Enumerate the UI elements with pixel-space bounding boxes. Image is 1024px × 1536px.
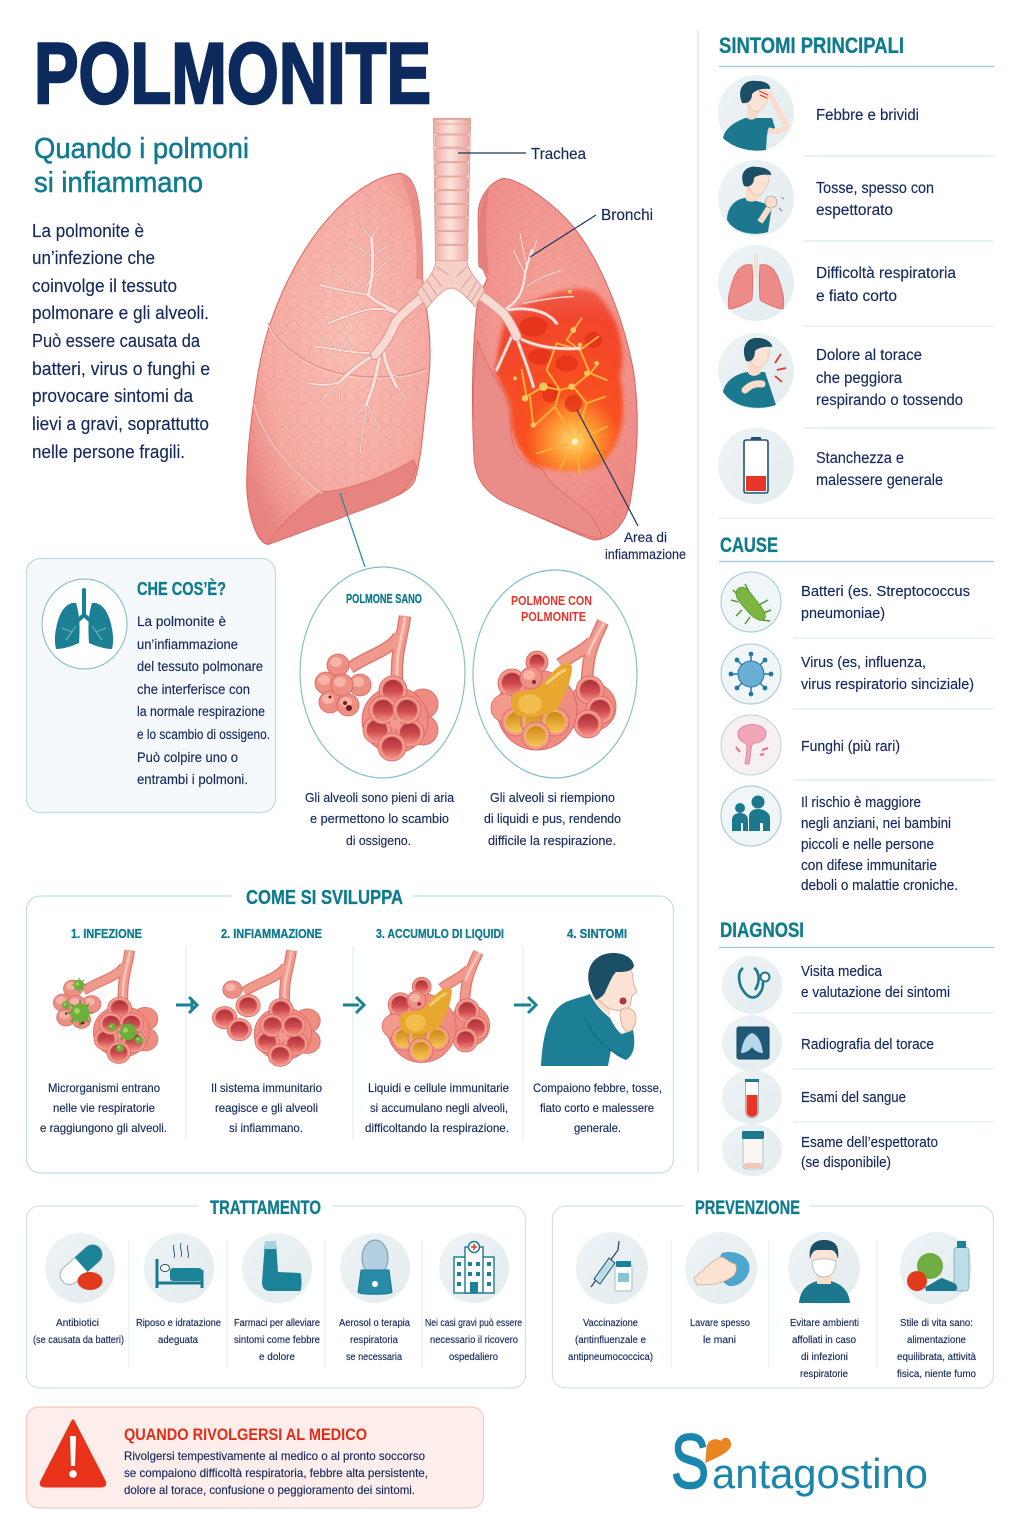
body text: entrambi i polmoni.: [137, 772, 248, 787]
leader line: trachea: [458, 152, 526, 154]
intro paragraph: nelle persone fragili.: [32, 442, 185, 462]
icon: fungi: [721, 715, 781, 775]
text: virus respiratorio sinciziale): [801, 677, 974, 693]
step 2: infiammazione: si infiammano.: [229, 1121, 303, 1135]
illustration: healthy alveoli: [315, 616, 438, 761]
text: Difficoltà respiratoria: [816, 265, 956, 282]
step 3: accumulo di liquidi: [365, 927, 509, 1135]
item: riposo: [136, 1233, 221, 1346]
item: aerosol: Aerosol o terapia: [339, 1318, 410, 1329]
icon: x-ray: [722, 1015, 782, 1071]
item: stile di vita: equilibrata, attività: [897, 1352, 976, 1363]
intro paragraph: lievi a gravi, soprattutto: [32, 414, 209, 434]
text: [801, 1135, 938, 1171]
icon: virus: [721, 644, 781, 704]
leader line: to alveoli: [340, 493, 365, 567]
label: inflammation area: Area di: [624, 530, 667, 545]
text: espettorato: [816, 202, 893, 219]
item: aerosol: se necessaria: [346, 1352, 402, 1363]
heading: POLMONE CON: [511, 594, 592, 608]
panel: che cos'è: [26, 558, 276, 812]
item: lavare le mani: [685, 1232, 757, 1346]
text: Febbre e brividi: [816, 107, 919, 124]
step 1: infezione: Microrganismi entrano: [48, 1081, 160, 1095]
title: POLMONITE: [34, 26, 431, 122]
intro paragraph: [32, 221, 210, 462]
item: aerosol: respiratoria: [350, 1335, 398, 1346]
icon: bacteria: [721, 572, 781, 632]
text: [816, 347, 963, 409]
text: Visita medica: [801, 964, 883, 980]
text: [816, 450, 943, 489]
panel: sintomi principali: [718, 33, 994, 518]
item: vaccinazione: antipneumococcica): [568, 1352, 653, 1363]
item: stile di vita: Stile di vita sano:: [900, 1318, 973, 1329]
item: stile di vita: [897, 1232, 976, 1380]
step 2: infiammazione: 2. INFIAMMAZIONE: [221, 927, 322, 941]
caption: di ossigeno.: [346, 833, 411, 848]
text: Radiografia del torace: [801, 1037, 934, 1053]
panel: come si sviluppa: [26, 887, 674, 1173]
text: Esame dell’espettorato: [801, 1135, 938, 1151]
body text: Rivolgersi tempestivamente al medico o al pronto soccorso: [124, 1449, 425, 1463]
heading: CAUSE: [720, 534, 778, 557]
trachea: [417, 118, 485, 308]
item: ospedale: Nei casi gravi può essere: [425, 1318, 522, 1329]
text: [801, 584, 970, 622]
icon: blood tube: [722, 1070, 782, 1124]
item: farmaci: Farmaci per alleviare: [234, 1318, 320, 1329]
item: farmaci: [234, 1233, 320, 1363]
step 3: accumulo di liquidi: difficoltando la respirazione.: [365, 1121, 509, 1135]
heading: QUANDO RIVOLGERSI AL MEDICO: [124, 1425, 367, 1444]
icon: heart: [705, 1438, 731, 1463]
body text: un’infiammazione: [137, 637, 238, 652]
subtitle: Quando i polmoni: [34, 133, 249, 165]
inflammation area: [495, 289, 623, 473]
item: vaccinazione: Vaccinazione: [583, 1318, 638, 1329]
icon: lungs: [42, 579, 127, 669]
text: pneumoniae): [801, 606, 885, 622]
column divider: [697, 30, 699, 1172]
body text: [137, 614, 270, 787]
item: lavare le mani: le mani: [703, 1335, 736, 1346]
panel: healthy lung: [300, 567, 465, 848]
label: trachea: Trachea: [531, 146, 586, 163]
text: Stanchezza e: [816, 450, 904, 467]
text: [801, 655, 974, 693]
item: ospedale: [425, 1233, 522, 1363]
arrow: [176, 997, 197, 1013]
intro paragraph: Può essere causata da: [32, 331, 201, 351]
item: antibiotici: (se causata da batteri): [33, 1335, 124, 1346]
text: Virus (es, influenza,: [801, 655, 926, 671]
heading: SINTOMI PRINCIPALI: [719, 33, 904, 58]
heading: PREVENZIONE: [695, 1198, 800, 1219]
step 4: sintomi: 4. SINTOMI: [567, 927, 627, 941]
right lung (inflamed): [472, 178, 637, 540]
item: mascherina: [788, 1232, 860, 1380]
intro paragraph: provocare sintomi da: [32, 386, 194, 406]
text: Esami del sangue: [801, 1090, 906, 1106]
body text: la normale respirazione: [137, 704, 265, 719]
leader line: inflammation: [577, 410, 638, 526]
step 1: infezione: e raggiungono gli alveoli.: [40, 1121, 167, 1135]
caption: [484, 790, 621, 848]
heading: DIAGNOSI: [720, 919, 804, 942]
panel: cause: [719, 534, 994, 894]
text: Dolore al torace: [816, 347, 922, 364]
body text: e lo scambio di ossigeno.: [137, 727, 270, 742]
body text: La polmonite è: [137, 614, 226, 629]
text: respirando o tossendo: [816, 392, 963, 409]
body text: che interferisce con: [137, 682, 250, 697]
item: farmaci: e dolore: [259, 1352, 295, 1363]
step 2: infiammazione: reagisce e gli alveoli: [215, 1101, 318, 1115]
item: aerosol: [339, 1233, 410, 1363]
item: mascherina: respiratorie: [800, 1369, 848, 1380]
text: piccoli e nelle persone: [801, 837, 934, 853]
text: che peggiora: [816, 370, 902, 387]
illustration: inflamed alveoli: [491, 622, 616, 750]
panel: pneumonia lung: [473, 570, 637, 848]
panel: prevenzione: [552, 1198, 994, 1388]
item: lavare le mani: Lavare spesso: [690, 1318, 750, 1329]
intro paragraph: polmonare e gli alveoli.: [32, 303, 209, 323]
item: vaccinazione: (antinfluenzale e: [575, 1335, 646, 1346]
panel: trattamento: [26, 1198, 526, 1388]
caption: difficile la respirazione.: [488, 833, 616, 848]
text: deboli o malattie croniche.: [801, 878, 958, 894]
item: antibiotici: Antibiotici: [56, 1318, 99, 1329]
body text: del tessuto polmonare: [137, 659, 263, 674]
body text: se compaiono difficoltà respiratoria, febbre alta persistente,: [124, 1466, 428, 1480]
logo: santagostino: S: [671, 1419, 709, 1505]
subtitle: si infiammano: [34, 167, 203, 199]
step 4: sintomi: generale.: [574, 1121, 621, 1135]
icon: sputum cup: [722, 1124, 782, 1176]
caption: Gli alveoli si riempiono: [490, 790, 615, 805]
step 4: sintomi: [533, 927, 662, 1135]
step 1: infezione: 1. INFEZIONE: [71, 927, 142, 941]
heading: CHE COS’È?: [137, 578, 226, 599]
icon: chest pain: [718, 333, 794, 409]
heading: [511, 594, 592, 624]
item: ospedale: necessario il ricovero: [430, 1335, 518, 1346]
illustration: coughing man: [541, 953, 637, 1066]
text: con difese immunitarie: [801, 858, 937, 874]
item: stile di vita: alimentazione: [907, 1335, 966, 1346]
body text: [124, 1449, 428, 1497]
intro paragraph: La polmonite è: [32, 221, 144, 241]
item: mascherina: di infezioni: [801, 1352, 848, 1363]
item: farmaci: sintomi come febbre: [234, 1335, 320, 1346]
body text: dolore al torace, confusione o peggioramento dei sintomi.: [124, 1483, 415, 1497]
step 4: sintomi: fiato corto e malessere: [540, 1101, 654, 1115]
item: ospedale: ospedaliero: [449, 1352, 498, 1363]
heading: POLMONITE: [521, 610, 586, 624]
heading: COME SI SVILUPPA: [246, 887, 403, 909]
item: mascherina: affollati in caso: [792, 1335, 856, 1346]
text: e valutazione dei sintomi: [801, 985, 950, 1001]
item: vaccinazione: [568, 1232, 653, 1363]
callout: quando rivolgersi al medico: [26, 1407, 484, 1508]
item: riposo: Riposo e idratazione: [136, 1318, 221, 1329]
caption: e permettono lo scambio: [310, 811, 449, 826]
text: [816, 265, 956, 305]
logo: santagostino: antagostino: [712, 1450, 928, 1497]
item: stile di vita: fisica, niente fumo: [897, 1369, 976, 1380]
panel: diagnosi: [719, 919, 994, 1176]
icon: lungs: [718, 245, 794, 321]
text: Batteri (es. Streptococcus: [801, 584, 970, 600]
step 1: infezione: nelle vie respiratorie: [53, 1101, 155, 1115]
heading: TRATTAMENTO: [210, 1198, 321, 1219]
intro paragraph: coinvolge il tessuto: [32, 276, 177, 296]
text: [816, 180, 934, 219]
text: Funghi (più rari): [801, 739, 900, 755]
step 3: accumulo di liquidi: si accumulano negli alveoli,: [370, 1101, 508, 1115]
step 1: infezione: [40, 927, 167, 1135]
arrow: [514, 997, 536, 1013]
item: mascherina: Evitare ambienti: [790, 1318, 859, 1329]
item: antibiotici: [33, 1233, 124, 1346]
icon: cough: [718, 160, 794, 236]
text: [801, 964, 950, 1001]
item: riposo: adeguata: [158, 1335, 198, 1346]
label: inflammation area: infiammazione: [605, 547, 686, 562]
label: inflammation area: [605, 530, 686, 562]
step 3: accumulo di liquidi: 3. ACCUMULO DI LIQUIDI: [376, 927, 504, 941]
left lung (healthy): [247, 173, 430, 544]
subtitle: [34, 133, 249, 199]
body text: Può colpire uno o: [137, 750, 238, 765]
caption: [305, 790, 455, 848]
icon: battery: [718, 428, 794, 504]
step 2: infiammazione: [211, 927, 322, 1135]
step 4: sintomi: Compaiono febbre, tosse,: [533, 1081, 662, 1095]
arrow: [343, 997, 364, 1013]
icon: fever: [718, 75, 794, 151]
label: bronchi: Bronchi: [601, 207, 653, 224]
caption: di liquidi e pus, rendendo: [484, 811, 621, 826]
intro paragraph: un’infezione che: [32, 248, 155, 268]
lungs illustration: [247, 118, 637, 544]
step 3: accumulo di liquidi: Liquidi e cellule immunitarie: [368, 1081, 509, 1095]
icon: stethoscope: [722, 956, 782, 1014]
text: (se disponibile): [801, 1155, 891, 1171]
heading: POLMONE SANO: [346, 592, 422, 606]
text: negli anziani, nei bambini: [801, 816, 951, 832]
leader line: bronchi: [530, 215, 596, 257]
icon: warning triangle: [41, 1421, 105, 1486]
text: Il rischio è maggiore: [801, 795, 921, 811]
text: e fiato corto: [816, 288, 897, 305]
icon: people at risk: [721, 786, 781, 846]
text: malessere generale: [816, 472, 943, 489]
intro paragraph: batteri, virus o funghi e: [32, 359, 210, 379]
text: Tosse, spesso con: [816, 180, 934, 197]
text: [801, 795, 958, 894]
logo: santagostino: [671, 1419, 928, 1505]
caption: Gli alveoli sono pieni di aria: [305, 790, 455, 805]
step 2: infiammazione: Il sistema immunitario: [211, 1081, 322, 1095]
